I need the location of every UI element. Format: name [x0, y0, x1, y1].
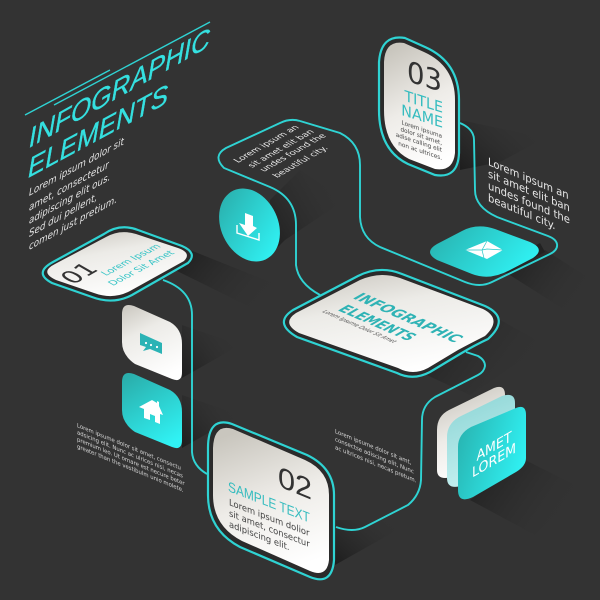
centre caption: Lorem Ipsume Dolor Sit Amet — [320, 309, 399, 344]
panel 02 body: adipiscing elit. — [229, 520, 290, 553]
panel 02 body: sit amet, consectur — [229, 509, 310, 550]
icon: mail tile — [430, 226, 545, 277]
text: lower left: greater than the vestibulm unio molete. — [77, 444, 184, 494]
label 03: 03 — [407, 54, 442, 99]
text: top box: beautiful city. — [271, 145, 331, 179]
text: lower left: premium leo. Ut ornare est necure beter — [77, 437, 185, 488]
panel 01 caption: Lorem Ipsum — [99, 243, 164, 278]
panel: 01 — [43, 227, 192, 301]
text: top box: Lorem ipsum an — [232, 124, 302, 164]
text: lower left: adsicing elit. Nunc ac ulrices nisi, necas — [77, 430, 183, 480]
panel 03 title: NAME — [401, 101, 443, 132]
centre heading: ELEMENTS — [333, 303, 421, 343]
panel 03 body: adise calling elit — [396, 131, 443, 154]
panel 02 subtitle: SAMPLE TEXT — [228, 478, 310, 526]
icon: home tile — [122, 373, 182, 448]
panel: 03 — [379, 38, 459, 176]
title: INFOGRAPHIC — [29, 22, 210, 154]
label 02: 02 — [278, 461, 312, 507]
panel 03 body: Lorem ipsuma — [402, 119, 442, 140]
text: lower left: Lorem ipsume dolor sit amet, consectu — [77, 423, 181, 472]
connector lines — [163, 120, 557, 530]
text: top box — [232, 124, 331, 179]
panel 01 caption: Dolor Sit Amet — [106, 249, 178, 288]
panel: 02 — [208, 422, 334, 579]
text: top box: sit amet elit ban — [246, 129, 317, 169]
title — [28, 22, 210, 184]
panel 03 body: dolor sit amet, — [401, 126, 442, 147]
text: right: beautiful city. — [488, 191, 555, 233]
intro text: amet, consectetur — [29, 159, 110, 214]
text: middle: consectse adiscing elit, Nunc — [335, 437, 414, 476]
icon: stacked cards — [437, 387, 526, 499]
text: right: Lorem ipsum an — [488, 155, 569, 202]
icon: chat tile — [122, 305, 182, 380]
intro text: comen just pretium. — [29, 194, 117, 253]
panel 02 body: Lorem ipsum dolior — [229, 498, 310, 539]
intro text: Lorem ipsum dolor sit — [29, 136, 125, 199]
title: ELEMENTS — [28, 78, 168, 184]
panel 03 body — [396, 119, 443, 162]
label 01: 01 — [54, 259, 105, 288]
panel: centre — [284, 270, 499, 377]
text: right — [488, 155, 570, 233]
icon: download — [208, 179, 291, 271]
text: middle: ac ultrices nisi, necas pretum. — [335, 445, 417, 485]
intro text — [29, 136, 125, 253]
shadows — [175, 120, 600, 565]
text: middle: Lorem ipsume dolor sit amt, — [335, 429, 411, 467]
panel 03 title: TITLE — [404, 87, 443, 117]
stack label: LOREM — [472, 441, 516, 482]
intro text: Sed dui pellent, — [29, 192, 97, 240]
intro text: adipiscing elit ous. — [29, 172, 110, 227]
panel 03 title — [401, 87, 443, 132]
text: right: undes found the — [488, 179, 570, 227]
text: right: sit amet elit ban — [488, 167, 570, 215]
panel 03 body: non ac ultrices. — [398, 140, 442, 162]
centre heading: INFOGRAPHIC — [348, 291, 467, 345]
title rules — [25, 22, 210, 115]
text: top box: undes found the — [258, 133, 329, 173]
stack label: AMET — [476, 429, 512, 465]
